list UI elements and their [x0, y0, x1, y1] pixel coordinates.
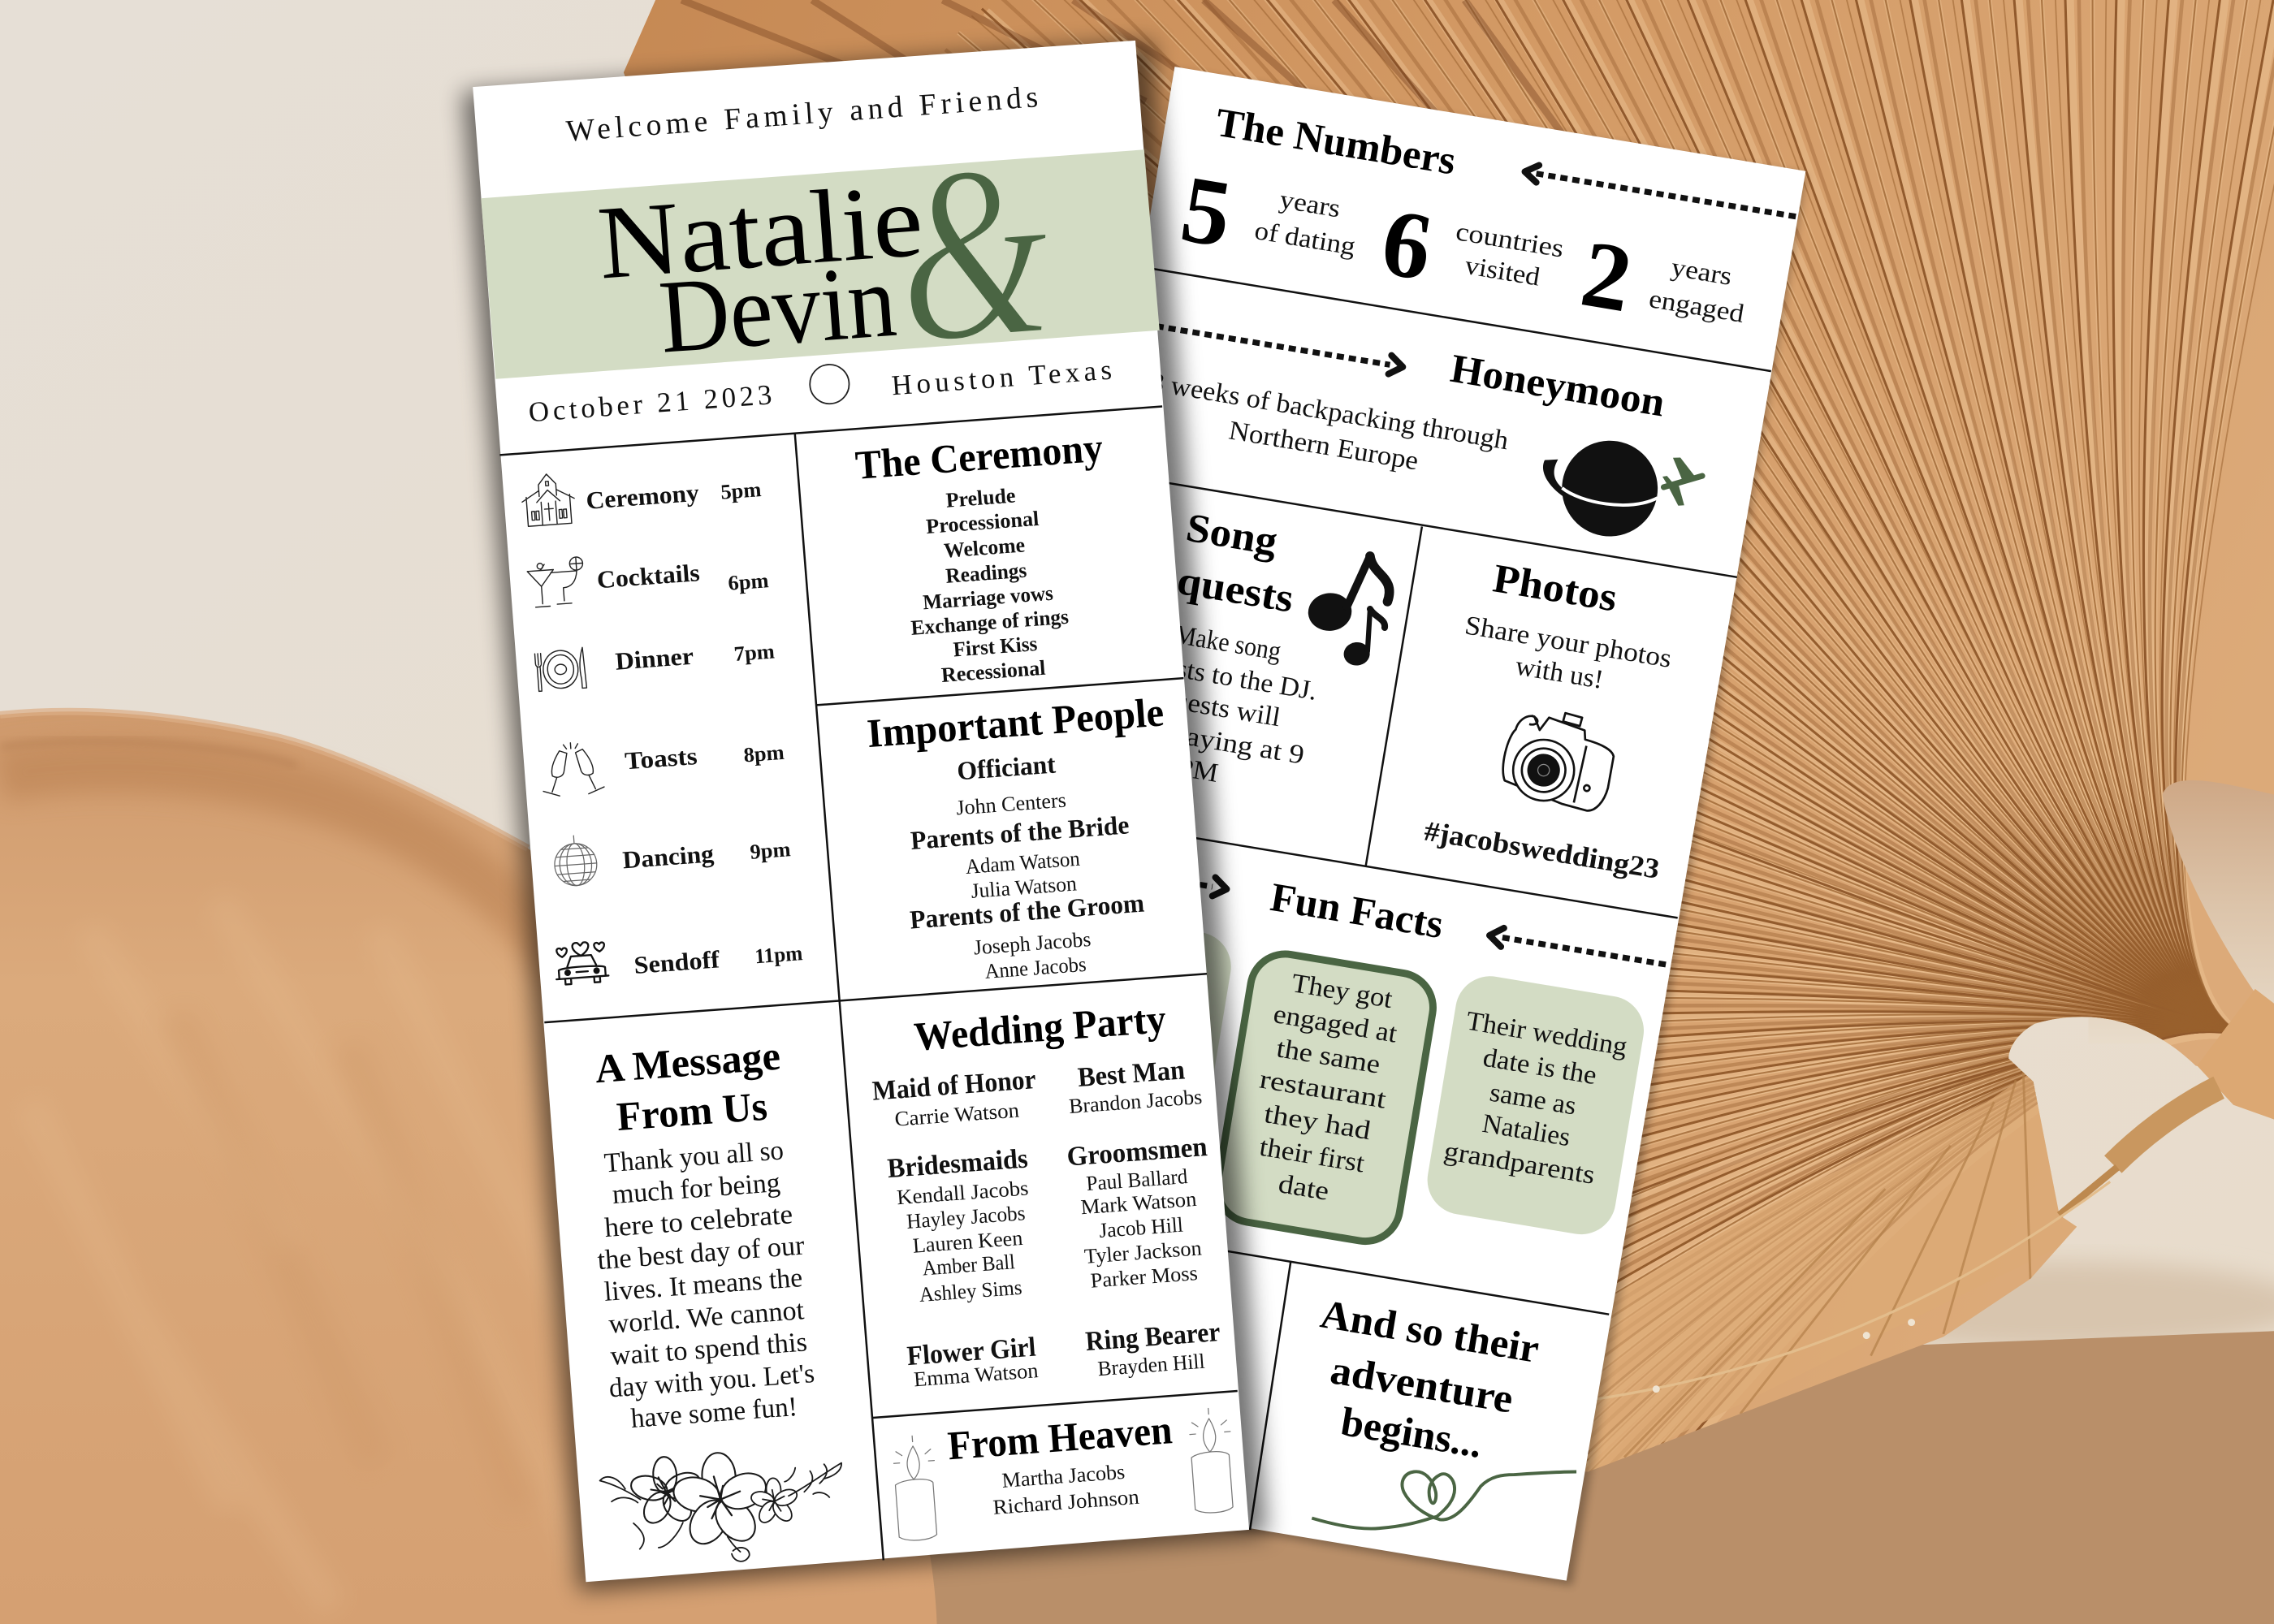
- text: song requests body: Make song: [1173, 620, 1283, 667]
- arrow: dotted right to fun facts: [1042, 849, 1228, 898]
- panel: fun fact centre: date: [1276, 1169, 1331, 1207]
- icon: heart swirl line: [1312, 1471, 1576, 1529]
- panel: schedule: 8pm: [743, 741, 785, 767]
- stat: 5 years of dating: 5: [1174, 156, 1239, 268]
- icon: music notes: [1296, 547, 1396, 672]
- panel: important people: Julia Watson: [971, 871, 1078, 903]
- panel: fun fact centre: [1213, 949, 1438, 1246]
- icon: camera: [1495, 701, 1624, 818]
- panel: fun fact right: same as: [1488, 1078, 1578, 1121]
- panel: fun fact centre: engaged at: [1271, 1000, 1399, 1049]
- panel: wedding party: Wedding Party: [912, 996, 1167, 1060]
- text: song requests body: Guests will: [1152, 683, 1282, 732]
- panel: wedding party: Tyler Jackson: [1083, 1236, 1203, 1268]
- icon: cocktails: [526, 556, 586, 607]
- stat: 6 countries visited: 6: [1375, 189, 1439, 301]
- stat: 6 countries visited: [1375, 189, 1568, 322]
- panel: schedule: Dinner: [614, 642, 694, 676]
- panel: important people: [866, 689, 1182, 991]
- panel: a message from us: A Message: [594, 1033, 782, 1091]
- stat: 5 years of dating: years: [1278, 184, 1342, 223]
- panel: schedule: Cocktails: [596, 559, 701, 594]
- arrow: dotted left: [1524, 163, 1800, 226]
- heading: Song Requests: Requests: [1123, 549, 1297, 621]
- background: shaded wall behind fan: [1813, 768, 2274, 1349]
- panel: important people: Adam Watson: [965, 847, 1081, 879]
- panel: wedding party: Best Man: [1077, 1055, 1186, 1093]
- panel: a message from us: much for being: [612, 1168, 781, 1210]
- text: honeymoon details: [1143, 368, 1511, 490]
- panel: important people: Joseph Jacobs: [973, 927, 1092, 959]
- panel: wedding party: Paul Ballard: [1085, 1164, 1188, 1195]
- panel: schedule: 5pm: [720, 477, 763, 504]
- panel: from heaven: [891, 1402, 1237, 1541]
- icon: floral sprig: [599, 1444, 848, 1571]
- panel: wedding party: Kendall Jacobs: [896, 1176, 1029, 1209]
- panel: wedding party: Mark Watson: [1080, 1187, 1197, 1219]
- panel: the ceremony: Prelude: [945, 484, 1016, 512]
- icon: getaway car with hearts: [554, 940, 609, 985]
- text: date: October 21 2023: [528, 378, 773, 428]
- heading: Honeymoon: Honeymoon: [1447, 345, 1668, 425]
- stat: 2 years engaged: years: [1669, 252, 1734, 291]
- panel: wedding party: Ashley Sims: [919, 1276, 1022, 1307]
- text: share your photos: Share your photos: [1463, 611, 1674, 674]
- stat: 2 years engaged: engaged: [1647, 283, 1746, 328]
- text: and so their adventure begins: And so their: [1317, 1290, 1542, 1371]
- text: share your photos: [1458, 611, 1674, 706]
- panel: schedule: Sendoff: [633, 945, 721, 979]
- background: fabric table: [725, 1331, 2274, 1624]
- icon: church: [521, 473, 576, 527]
- panel: a message from us: wait to spend this: [609, 1327, 808, 1371]
- panel: wedding party: [867, 993, 1224, 1396]
- text: song requests body: requests to the DJ.: [1114, 645, 1319, 706]
- text: and so their adventure begins: [1300, 1290, 1542, 1473]
- panel: the ceremony: Processional: [925, 507, 1040, 538]
- stat: 2 years engaged: 2: [1575, 221, 1639, 333]
- stat: 5 years of dating: [1174, 156, 1365, 289]
- arrow: dotted left from edge: [1488, 926, 1670, 974]
- panel: schedule: Toasts: [624, 742, 698, 775]
- panel: left card (front): [463, 37, 1268, 1592]
- panel: important people: Officiant: [956, 749, 1057, 785]
- panel: a message from us: [581, 1032, 818, 1436]
- panel: schedule: 7pm: [733, 639, 776, 666]
- panel: fun fact right: Their wedding: [1464, 1007, 1629, 1062]
- heading: Song Requests: Song: [1183, 504, 1281, 564]
- panel: wedding party: Maid of Honor: [871, 1065, 1037, 1107]
- panel: schedule: 9pm: [749, 837, 792, 864]
- panel: the ceremony: Readings: [945, 559, 1027, 588]
- panel: important people: Parents of the Bride: [910, 810, 1130, 855]
- background: woven palm fan: [624, 0, 2274, 1471]
- panel: important people: Parents of the Groom: [909, 888, 1145, 935]
- panel: a message from us: here to celebrate: [603, 1199, 793, 1243]
- title: Devin: Devin: [655, 242, 900, 375]
- text: honeymoon details: 3 weeks of backpacking through: [1148, 368, 1511, 456]
- stat: 6 countries visited: countries: [1454, 216, 1566, 263]
- panel: wedding party: Parker Moss: [1090, 1261, 1199, 1293]
- text: song requests body: PM: [1175, 753, 1220, 788]
- text: hashtag: #jacobswedding23: [1422, 815, 1662, 885]
- panel: fun fact centre: they had: [1262, 1099, 1373, 1146]
- panel: a message from us: From Us: [615, 1083, 769, 1139]
- panel: the ceremony: Recessional: [940, 656, 1046, 687]
- panel: fun fact right: date is the: [1481, 1043, 1598, 1091]
- panel: the ceremony: Exchange of rings: [910, 605, 1070, 640]
- icon: left candle: [892, 1435, 940, 1541]
- panel: important people: Anne Jacobs: [984, 952, 1087, 983]
- panel: a message from us: the best day of our: [596, 1231, 806, 1276]
- panel: fun fact right: grandparents: [1442, 1137, 1597, 1190]
- panel: fun fact centre: They got: [1290, 969, 1394, 1014]
- panel: important people: John Centers: [955, 788, 1067, 819]
- panel: from heaven: Richard Johnson: [992, 1485, 1140, 1519]
- panel: wedding party: Jacob Hill: [1098, 1213, 1184, 1242]
- panel: wedding party: Carrie Watson: [894, 1099, 1020, 1131]
- text: honeymoon details: Northern Europe: [1226, 416, 1420, 476]
- background: round wooden plate: [0, 711, 937, 1624]
- panel: fun fact centre: their first: [1257, 1133, 1367, 1179]
- panel: wedding party: Bridesmaids: [886, 1143, 1029, 1184]
- heading: The Numbers: The Numbers: [1213, 99, 1459, 184]
- icon: airplane: [1658, 456, 1705, 509]
- text: welcome: Welcome Family and Friends: [565, 80, 1039, 149]
- title: Natalie: Natalie: [594, 162, 927, 301]
- icon: champagne toast: [540, 741, 604, 797]
- panel: a message from us: have some fun!: [630, 1392, 798, 1434]
- panel: wedding party: Emma Watson: [913, 1358, 1039, 1391]
- heading: Photos: Photos: [1490, 555, 1620, 620]
- text: and so their adventure begins: adventure: [1327, 1346, 1516, 1422]
- icon: disco ball: [552, 834, 599, 887]
- panel: fun fact centre: the same: [1274, 1034, 1382, 1080]
- text: location: Houston Texas: [891, 354, 1113, 401]
- heading: Song Requests: [1123, 495, 1306, 621]
- heading: Fun Facts: Fun Facts: [1268, 874, 1446, 947]
- panel: wedding party: Flower Girl: [906, 1332, 1037, 1371]
- panel: a message from us: world. We cannot: [607, 1295, 806, 1340]
- panel: important people: Important People: [866, 689, 1165, 756]
- panel: fun fact centre: restaurant: [1257, 1065, 1388, 1115]
- panel: wedding party: Groomsmen: [1066, 1132, 1208, 1173]
- panel: a message from us: day with you. Let's: [608, 1358, 815, 1404]
- panel: the ceremony: Welcome: [943, 533, 1026, 563]
- panel: schedule: 11pm: [754, 941, 804, 968]
- panel: fun fact right: [1422, 971, 1649, 1240]
- panel: wedding party: Brandon Jacobs: [1068, 1085, 1203, 1118]
- panel: the ceremony: The Ceremony: [854, 425, 1105, 488]
- icon: right candle: [1188, 1407, 1236, 1514]
- icon: circle separator: [809, 363, 850, 405]
- icon: place setting: [534, 647, 586, 692]
- panel: wedding party: Brayden Hill: [1097, 1350, 1205, 1380]
- panel: a message from us: Thank you all so: [603, 1135, 785, 1178]
- panel: the ceremony: First Kiss: [953, 632, 1038, 661]
- panel: wedding party: Amber Ball: [922, 1250, 1016, 1280]
- panel: the ceremony: [854, 425, 1119, 692]
- panel: from heaven: From Heaven: [946, 1406, 1174, 1468]
- text: song requests body: [1097, 611, 1325, 802]
- panel: right card (back): [941, 67, 1805, 1586]
- stat: 6 countries visited: visited: [1463, 250, 1542, 292]
- panel: a message from us: lives. It means the: [603, 1263, 803, 1307]
- icon: planet with ring: [1533, 430, 1666, 544]
- panel: schedule: [520, 458, 804, 985]
- text: song requests body: start playing at 9: [1103, 709, 1306, 771]
- panel: fun fact left (mostly hidden): [1011, 907, 1236, 1173]
- panel: the ceremony: Marriage vows: [922, 581, 1054, 614]
- stat: 2 years engaged: [1575, 221, 1755, 352]
- panel: wedding party: Ring Bearer: [1084, 1317, 1221, 1357]
- panel: schedule: Ceremony: [585, 479, 700, 515]
- panel: schedule: Dancing: [621, 840, 715, 874]
- stat: 5 years of dating: of dating: [1252, 215, 1358, 261]
- panel: wedding party: Hayley Jacobs: [906, 1201, 1026, 1233]
- panel: fun fact right: Natalies: [1481, 1109, 1572, 1152]
- panel: wedding party: Lauren Keen: [912, 1226, 1023, 1258]
- text: share your photos: with us!: [1513, 652, 1606, 695]
- panel: green name band: [481, 149, 1160, 379]
- icon: ampersand: &: [888, 110, 1060, 396]
- arrow: dotted right: [1131, 313, 1404, 376]
- text: and so their adventure begins: begins...: [1338, 1398, 1485, 1466]
- panel: schedule: 6pm: [727, 568, 770, 595]
- panel: from heaven: Martha Jacobs: [1001, 1460, 1126, 1492]
